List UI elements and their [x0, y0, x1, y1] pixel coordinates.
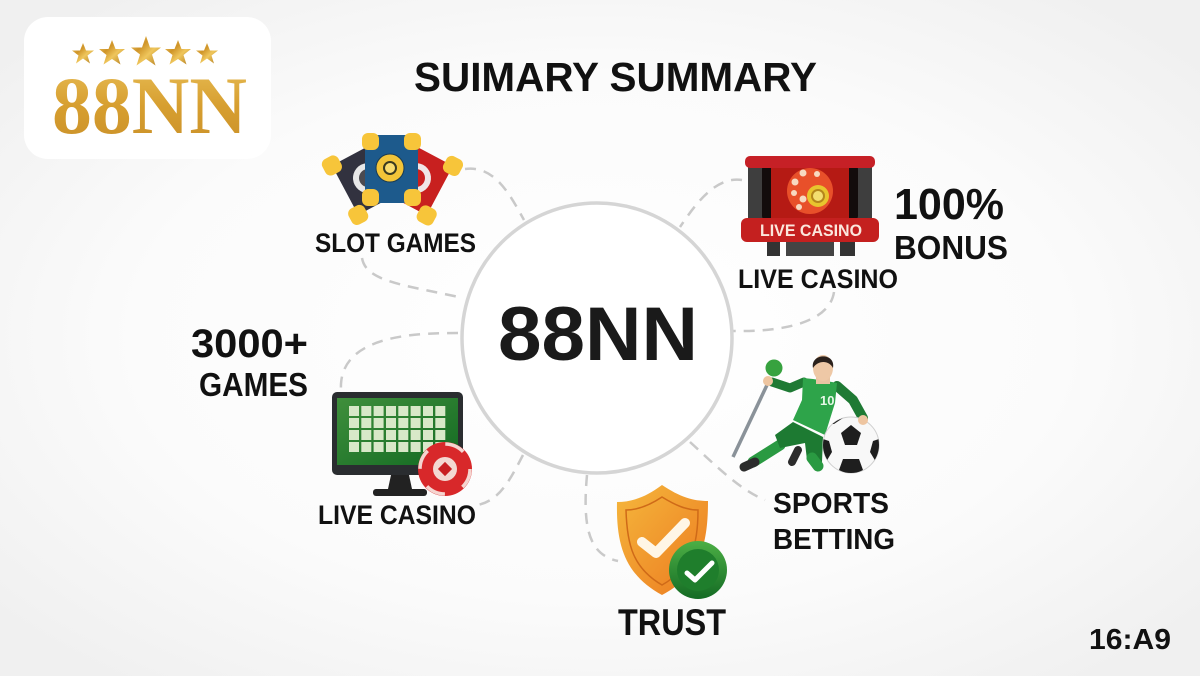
central circle — [462, 203, 732, 473]
label: trust: TRUST — [618, 602, 726, 643]
title: SUIMARY SUMMARY — [414, 54, 817, 100]
stat: 3000+ games: GAMES — [199, 366, 308, 403]
label: sports betting — [773, 488, 895, 556]
label: sports betting: SPORTS — [773, 488, 889, 520]
icon: football player — [733, 355, 884, 476]
stat: 3000+ games — [191, 322, 308, 403]
label: live casino right: LIVE CASINO — [738, 264, 898, 294]
logo stars — [72, 36, 218, 66]
central label: 88NN — [498, 292, 698, 377]
icon: monitor with casino chip — [332, 392, 472, 496]
logo wordmark: 88NN — [52, 60, 247, 151]
aspect ratio note: 16:A9 — [1089, 624, 1171, 656]
booth banner text: LIVE CASINO — [760, 221, 862, 240]
label: sports betting: BETTING — [773, 524, 895, 556]
stat: 100% bonus: BONUS — [894, 229, 1008, 266]
label: slot games: SLOT GAMES — [315, 228, 476, 258]
stat: 100% bonus: 100% — [894, 180, 1004, 229]
icon: slot game cards — [320, 133, 465, 228]
logo panel — [24, 17, 271, 159]
dashed connectors — [341, 169, 834, 561]
icon: football player: 10 — [820, 393, 834, 408]
stat: 3000+ games: 3000+ — [191, 322, 308, 366]
icon: trust shield — [617, 485, 727, 599]
icon: live casino booth — [741, 156, 879, 256]
label: live casino left: LIVE CASINO — [318, 500, 476, 530]
stat: 100% bonus — [894, 180, 1008, 266]
